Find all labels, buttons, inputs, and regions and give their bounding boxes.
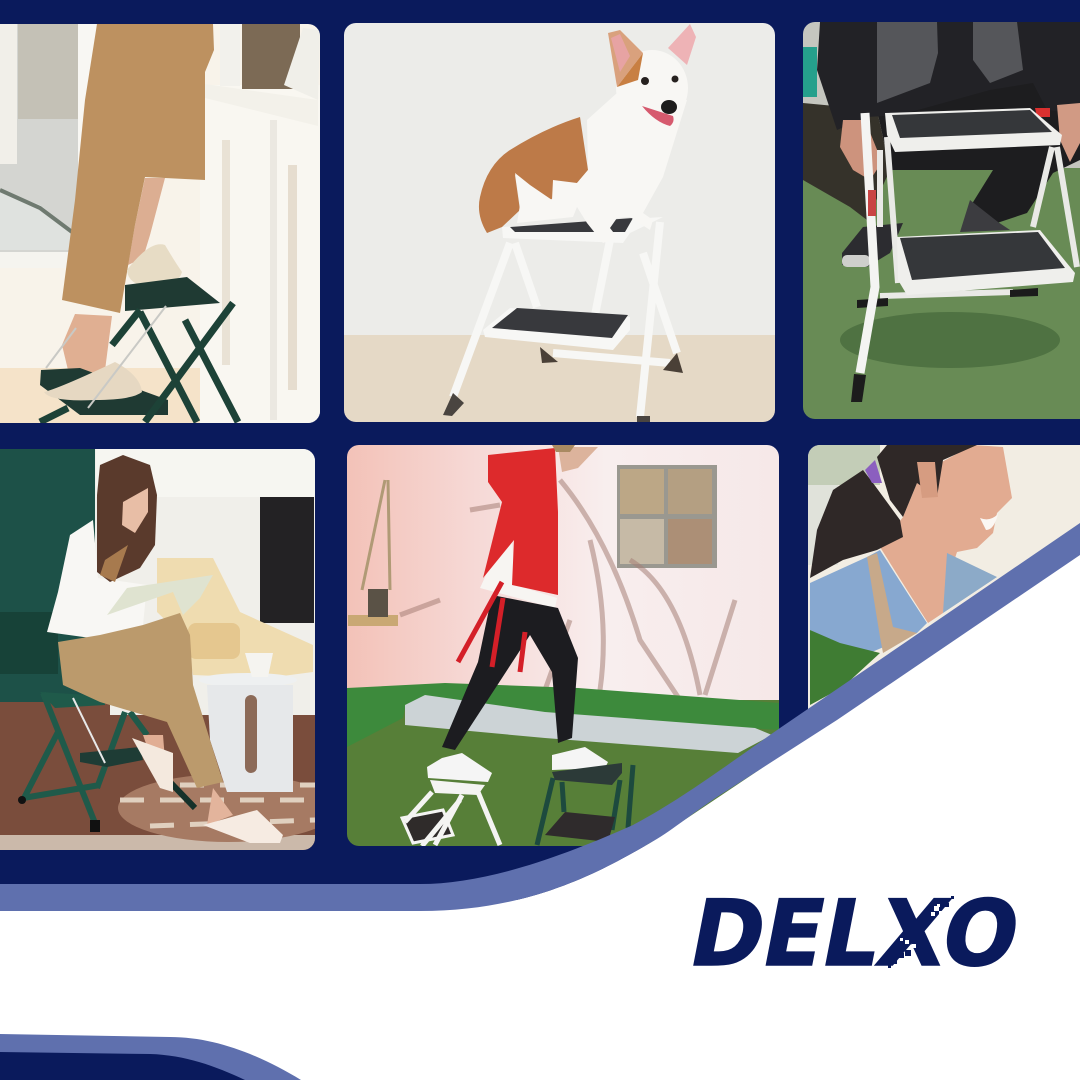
- logo: DELXO: DELXO: [682, 881, 1028, 987]
- light blue swoosh band: [0, 523, 1080, 911]
- panel: corgi on white stool: [344, 23, 775, 424]
- panel: smiling woman with denim shirt: [808, 445, 1080, 725]
- panel: woman reading on stool: [0, 449, 338, 850]
- white curved lower area: [0, 555, 1080, 1080]
- bottom-left corner swoosh: [0, 1034, 301, 1080]
- icon: woman with book: [47, 455, 283, 843]
- icon: green stool: [18, 692, 195, 832]
- panel: woman stepping on green stool: [0, 24, 320, 425]
- panel: woman in red stepping between stools: [347, 445, 779, 846]
- icon: white folded stool: [402, 780, 500, 846]
- icon: white two-step stool: [851, 108, 1077, 402]
- icon: green folded stool: [537, 763, 633, 845]
- icon: white two-step stool: [443, 217, 683, 424]
- panel: person unfolding stool on grass: [803, 22, 1080, 420]
- icon: corgi dog: [479, 24, 696, 243]
